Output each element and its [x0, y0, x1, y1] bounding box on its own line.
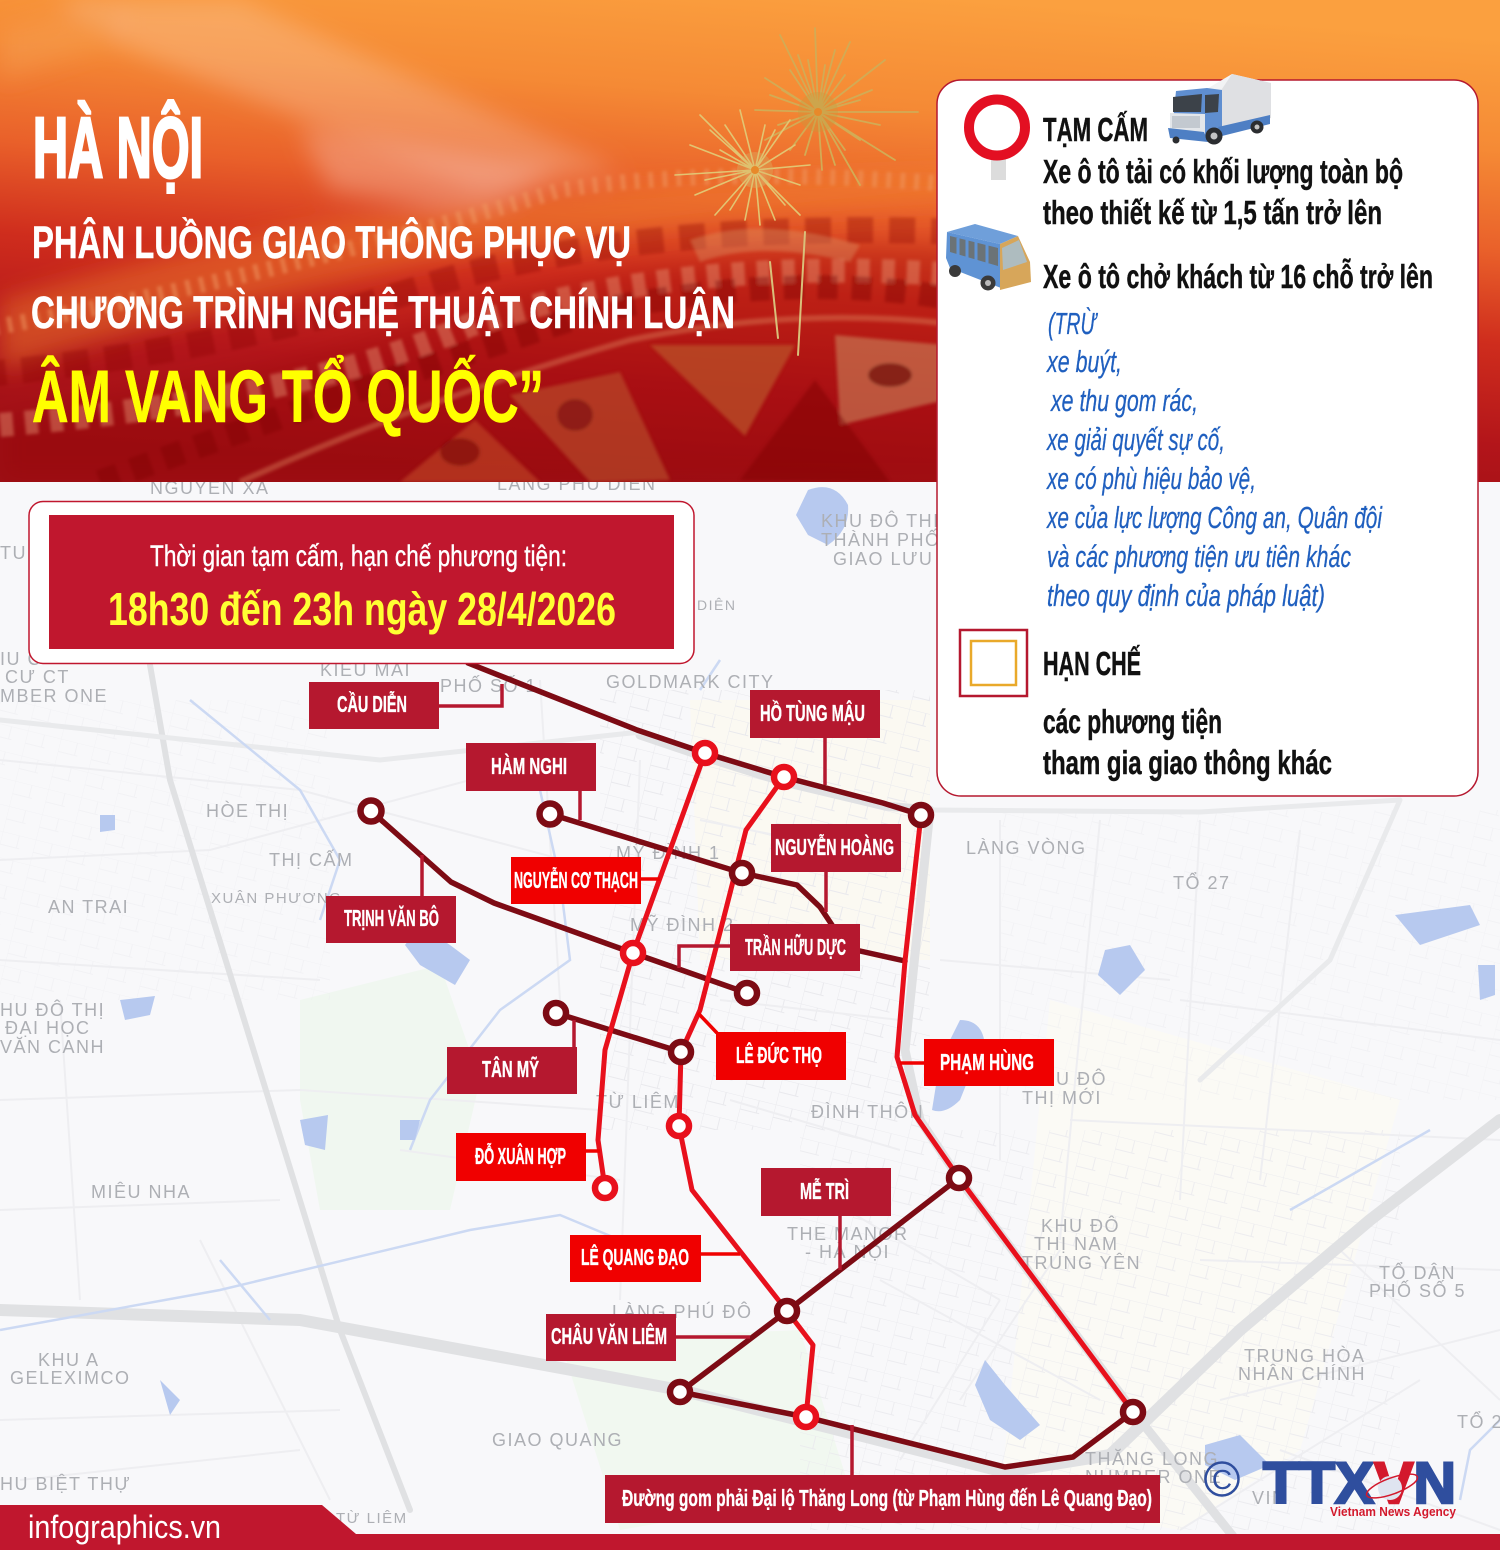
- street label: Hàm Nghi: HÀM NGHI: [491, 752, 567, 779]
- map place labels: ĐÌNH THÔN: [811, 1101, 924, 1122]
- street label: Đỗ Xuân Hợp: ĐỖ XUÂN HỢP: [475, 1141, 566, 1169]
- street label: Hàm Nghi: [466, 743, 596, 791]
- street label: Hồ Tùng Mậu: [750, 690, 880, 738]
- street label: Lê Đức Thọ: LÊ ĐỨC THỌ: [736, 1041, 822, 1068]
- text: other vehicles: tham gia giao thông khác: [1043, 744, 1332, 781]
- text: other vehicles: các phương tiện: [1043, 703, 1222, 740]
- street label: Châu Văn Liêm: [546, 1314, 676, 1361]
- map place labels: - HÀ NỘI: [805, 1241, 890, 1262]
- street label: Tân Mỹ: TÂN MỸ: [482, 1055, 539, 1082]
- street label: Cầu Diễn: CẦU DIỄN: [337, 689, 407, 717]
- map place labels: LÀNG PHÚ ĐÔ: [612, 1301, 753, 1322]
- map place labels: THĂNG LONG: [1085, 1449, 1219, 1469]
- title: PHÂN LUỒNG GIAO THÔNG PHỤC VỤ: [32, 217, 631, 268]
- text: other vehicles: [1043, 703, 1332, 781]
- text: exemptions: và các phương tiện ưu tiên khác: [1047, 539, 1351, 574]
- map place labels: NUMBER ONE: [1085, 1467, 1222, 1487]
- mandala bands: [0, 176, 960, 482]
- map place labels: GOLDMARK CITY: [606, 672, 775, 692]
- map place labels: KHU A: [38, 1350, 100, 1370]
- street label: Châu Văn Liêm: CHÂU VĂN LIÊM: [551, 1322, 667, 1349]
- map place labels: MỸ ĐÌNH 1: [616, 842, 721, 863]
- street label: Lê Quang Đạo: [570, 1235, 701, 1282]
- street label: Cầu Diễn: [309, 682, 439, 729]
- map place labels: MỸ ĐÌNH 2: [630, 914, 735, 935]
- logo: TTXVN: TTXVN: [1263, 1451, 1456, 1516]
- time restriction panel: [29, 502, 694, 664]
- map place labels: [0, 473, 1500, 1527]
- street label: Mễ Trì: MỄ TRÌ: [800, 1176, 849, 1204]
- header banner: [0, 0, 1500, 482]
- fireworks: [675, 28, 918, 355]
- street label: Trịnh Văn Bô: [326, 896, 456, 943]
- text: truck restriction: [1043, 153, 1403, 231]
- map place labels: XUÂN PHƯƠNG: [211, 890, 342, 907]
- map place labels: GIAO QUANG: [492, 1430, 623, 1450]
- text: exemptions: xe thu gom rác,: [1050, 383, 1198, 418]
- title: CHƯƠNG TRÌNH NGHỆ THUẬT CHÍNH LUẬN: [31, 287, 735, 338]
- routes: dark red streets: [371, 663, 1133, 1467]
- text: exemptions: [1046, 306, 1383, 613]
- street label: Đường gom Đại lộ Thăng Long: [605, 1475, 1160, 1523]
- map place labels: VĂN CANH: [0, 1037, 105, 1057]
- map place labels: TU: [0, 543, 27, 563]
- map place labels: IU C: [0, 649, 42, 669]
- street label: Nguyễn Cơ Thạch: NGUYỄN CƠ THẠCH: [514, 865, 638, 893]
- map place labels: TRUNG HÒA: [1244, 1345, 1366, 1366]
- time restriction panel: Thời gian tạm cấm, hạn chế phương tiện:: [150, 540, 567, 573]
- time restriction panel: 18h30 đến 23h ngày 28/4/2026: [108, 583, 616, 635]
- street label: Trần Hữu Dực: [730, 924, 860, 971]
- logo: TTXVN: C: [1212, 1464, 1232, 1495]
- map place labels: ĐẠI HỌC: [5, 1018, 91, 1038]
- heading: Hạn chế: HẠN CHẾ: [1043, 645, 1141, 682]
- site tag: infographics.vn: [28, 1509, 221, 1545]
- icon: bus: [946, 224, 1031, 290]
- text: exemptions: theo quy định của pháp luật): [1047, 578, 1325, 613]
- map place labels: LÀNG PHÚ DIỄN: [497, 473, 657, 494]
- street label: Mễ Trì: [761, 1168, 891, 1216]
- map place labels: DIÊN: [697, 597, 736, 613]
- legend panel: [937, 74, 1478, 796]
- map place labels: PHỐ SỐ 1: [440, 675, 537, 696]
- watermarks: INFOGRAPHICS: [67, 564, 332, 821]
- map place labels: GIAO LƯU: [833, 549, 933, 569]
- street label: Trần Hữu Dực: TRẦN HỮU DỰC: [745, 933, 846, 960]
- watermarks: INFOGRAPHICS: [1062, 1059, 1327, 1316]
- title: HÀ NỘI: [33, 100, 203, 196]
- map place labels: NHÂN CHÍNH: [1238, 1364, 1366, 1384]
- watermarks: INFOGRAPHICS: [177, 1199, 442, 1456]
- street label: Nguyễn Hoàng: [771, 824, 901, 872]
- street label: Lê Quang Đạo: LÊ QUANG ĐẠO: [581, 1243, 689, 1270]
- text: exemptions: (TRỪ: [1048, 306, 1098, 341]
- map place labels: TỔ DÂN: [1379, 1262, 1456, 1283]
- street label: Nguyễn Cơ Thạch: [511, 857, 641, 904]
- map place labels: HÒE THỊ: [206, 800, 289, 821]
- map place labels: THE MANOR: [787, 1224, 908, 1244]
- street label: Hồ Tùng Mậu: HỒ TÙNG MẬU: [760, 699, 865, 726]
- map place labels: TỪ LIÊM: [336, 1510, 408, 1527]
- route nodes: [360, 743, 1143, 1427]
- icon: restriction square: [960, 630, 1027, 696]
- street label: Phạm Hùng: PHẠM HÙNG: [940, 1048, 1034, 1075]
- icon: truck: [1168, 74, 1271, 144]
- map place labels: NGUYÊN XÁ: [150, 478, 270, 498]
- map place labels: HU ĐÔ THỊ: [0, 999, 105, 1020]
- map place labels: TỪ LIÊM: [596, 1091, 680, 1112]
- map place labels: U ĐÔ: [1056, 1068, 1107, 1089]
- street label: Tân Mỹ: [447, 1047, 577, 1094]
- icon: prohibition sign: [969, 100, 1025, 180]
- street label: Phạm Hùng: [924, 1039, 1054, 1086]
- watermarks: [67, 564, 1370, 1456]
- map place labels: TRUNG YÊN: [1022, 1253, 1141, 1273]
- street label: Đỗ Xuân Hợp: [456, 1133, 586, 1181]
- routes: bright red streets: [598, 753, 1133, 1417]
- logo: TTXVN: Vietnam News Agency: [1330, 1504, 1457, 1519]
- watermarks: VNA: [1277, 594, 1370, 686]
- map place labels: HU BIỆT THỰ: [0, 1474, 131, 1494]
- site tag: [0, 1505, 356, 1545]
- map place labels: PHỐ SỐ 5: [1369, 1280, 1466, 1301]
- street label: Lê Đức Thọ: [716, 1032, 846, 1080]
- text: exemptions: xe giải quyết sự cố,: [1046, 422, 1225, 457]
- map background: [0, 482, 1500, 1550]
- map place labels: KIỀU MAI: [320, 659, 411, 680]
- map place labels: THỊ NAM: [1034, 1234, 1118, 1254]
- map place labels: MIÊU NHA: [91, 1182, 191, 1202]
- text: exemptions: xe buýt,: [1046, 344, 1122, 379]
- text: truck restriction: theo thiết kế từ 1,5 tấn trở lên: [1043, 194, 1382, 231]
- map place labels: VIN: [1252, 1488, 1287, 1508]
- map place labels: CƯ CT: [5, 667, 70, 687]
- heading: Tạm cấm: TẠM CẤM: [1043, 111, 1148, 148]
- title: ÂM VANG TỔ QUỐC”: [32, 355, 544, 438]
- street label: Nguyễn Hoàng: NGUYỄN HOÀNG: [775, 832, 894, 860]
- map place labels: THÀNH PHỐ: [821, 529, 941, 550]
- map place labels: GELEXIMCO: [10, 1368, 131, 1388]
- footer bar: [0, 1534, 1500, 1550]
- map place labels: AN TRAI: [48, 897, 129, 917]
- street label: Trịnh Văn Bô: TRỊNH VĂN BÔ: [344, 904, 439, 931]
- text: exemptions: xe có phù hiệu bảo vệ,: [1046, 461, 1256, 496]
- map place labels: MBER ONE: [0, 686, 108, 706]
- map place labels: THỊ CẤM: [269, 849, 354, 870]
- street label: Đường gom Đại lộ Thăng Long: Đường gom phải Đại lộ Thăng Long (từ Phạm Hùng đến Lê Quang Đạo): [622, 1485, 1152, 1511]
- map place labels: LÀNG VÒNG: [966, 837, 1087, 858]
- map place labels: THỊ MỚI: [1022, 1087, 1102, 1108]
- map place labels: KHU ĐÔ THỊ: [821, 510, 940, 531]
- map place labels: TỔ 27: [1173, 872, 1231, 893]
- map place labels: KHU ĐÔ: [1041, 1215, 1120, 1236]
- connector lines: [422, 684, 924, 1475]
- title: [31, 100, 735, 438]
